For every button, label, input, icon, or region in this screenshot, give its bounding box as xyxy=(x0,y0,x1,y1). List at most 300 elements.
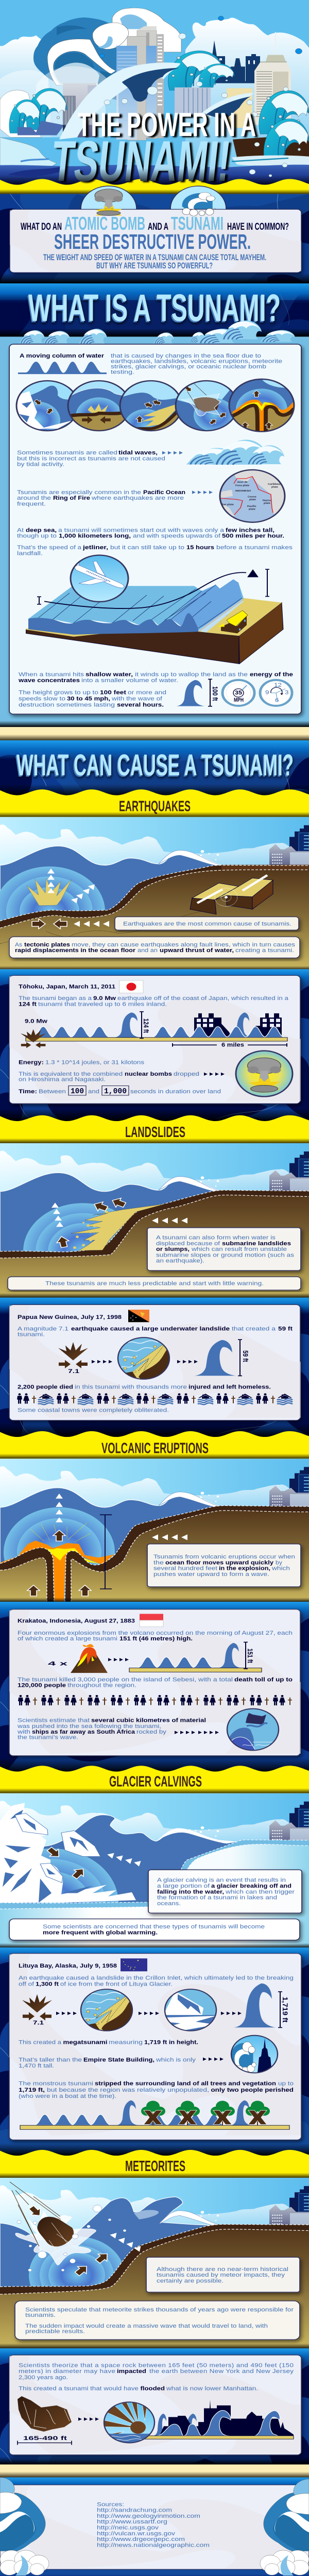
text: height grows: with the wave of xyxy=(111,696,163,702)
ground xyxy=(0,1840,309,1947)
map: ring of fire: Nazca xyxy=(263,499,271,502)
seabed xyxy=(0,2224,309,2348)
circle: landslide xyxy=(81,1989,132,2031)
triangles up xyxy=(47,869,55,893)
icon: atomic bomb circle xyxy=(81,186,136,231)
flood text: This created a tsunami that would have xyxy=(19,2385,139,2392)
icon: 1,719 ft wave xyxy=(234,1984,276,2027)
body text: An earthquake caused a landslide in the Crillon Inlet, which ultimately led to the breaking xyxy=(19,1975,294,1981)
height marker large xyxy=(265,569,269,597)
source list: http://sandrachung.com xyxy=(97,2507,172,2513)
intro question: ATOMIC BOMB xyxy=(64,213,145,234)
triangles left xyxy=(152,1534,187,1540)
shockwave rings xyxy=(0,867,105,956)
text: tidal waves: by tidal activity. xyxy=(17,461,64,467)
circle: earthquake cause xyxy=(67,380,125,432)
callout: volcanic tsunamis: Tsunamis from volcanic eruptions occur when xyxy=(153,1553,295,1560)
text: height grows: or more and xyxy=(128,689,166,696)
decorative wave row xyxy=(19,320,295,344)
sea xyxy=(0,1815,236,1906)
text: shallow water: wave concentrates xyxy=(18,677,80,684)
megatsunami text: measuring xyxy=(109,2039,143,2045)
death toll text: 120,000 people xyxy=(18,1682,66,1688)
text: speed: and with speeds upwards of xyxy=(133,533,221,539)
circle: glacier cause xyxy=(15,380,73,432)
text: definition: strikes, glacier calvings, or oceanic nuclear bomb xyxy=(111,363,266,370)
source list: Sources: xyxy=(97,2501,124,2507)
text: speed: 500 miles per hour. xyxy=(222,533,284,539)
ice chunk middle xyxy=(61,1831,100,1856)
pale building xyxy=(175,88,252,128)
text: definition: that is caused by changes in the sea floor due to xyxy=(111,352,261,359)
flag: Indonesia xyxy=(140,1614,163,1627)
ice chunk upper xyxy=(15,1813,48,1835)
map: ring of fire: plate xyxy=(249,498,256,501)
note: Some coastal towns were completely obliterated. xyxy=(18,1407,169,1413)
cream band xyxy=(0,727,309,740)
eruption rays xyxy=(31,1523,90,1542)
starburst xyxy=(27,878,72,906)
icon: bomb base xyxy=(95,209,122,215)
dark bottom edge xyxy=(0,966,309,969)
map: ring of fire: Cocos xyxy=(248,496,256,498)
circle: iceberg xyxy=(165,1989,216,2031)
callout: submarine landslides: A tsunami can also form when water is xyxy=(156,1234,276,1241)
vegetation text: 1,719 ft, xyxy=(19,2087,45,2093)
text: deep sea: few inches tall, xyxy=(226,527,274,533)
brown arrows xyxy=(56,1196,127,1248)
megatsunami text: megatsunami xyxy=(63,2039,107,2045)
sea xyxy=(0,1173,227,1268)
body text: 2,300 years ago. xyxy=(19,2374,68,2381)
panel: Lituya Bay xyxy=(9,1954,301,2140)
megatsunami text: This created a xyxy=(19,2039,61,2045)
callout: volcanic tsunamis: in the explosion, xyxy=(219,1565,270,1571)
text: definition: earthquakes, landslides, volcanic eruptions, meteorite xyxy=(111,358,282,364)
big blue curling wave xyxy=(33,8,181,100)
plate arrows xyxy=(32,919,67,929)
source list: http://news.nationalgeographic.com xyxy=(97,2542,210,2548)
label: 7.1: 7.1 xyxy=(33,2020,44,2026)
body text: The tsunami began as a xyxy=(19,995,92,1002)
fog over skyline xyxy=(36,66,118,125)
intro section background xyxy=(0,194,309,283)
callout: glacier calving: A glacier calving is an event that results in xyxy=(157,1877,286,1883)
circle: landslide cause xyxy=(119,380,179,432)
big wave xyxy=(114,1012,140,1038)
casualty text: in this tsunami with thousands more xyxy=(75,1384,187,1390)
map: ring of fire: Pacific xyxy=(247,505,256,508)
text: ring of fire: where earthquakes are more xyxy=(91,495,184,501)
teal waves right xyxy=(259,91,309,162)
lava orange xyxy=(0,1540,114,1565)
intro question: AND A xyxy=(148,221,168,232)
label: 151 ft: 151 ft xyxy=(246,1649,254,1663)
heading: LANDSLIDES xyxy=(125,1123,185,1140)
circle: empire state building xyxy=(230,2036,278,2073)
map: ring of fire: plate xyxy=(271,486,278,488)
flood text: what is now lower Manhattan. xyxy=(166,2385,258,2392)
panel: intro xyxy=(10,208,301,273)
dashed crust lines xyxy=(0,1505,309,1602)
callout: submarine landslides: submarine landslides xyxy=(222,1240,291,1246)
empire state text: Empire State Building, xyxy=(83,2057,154,2063)
panel: meteor fact xyxy=(9,2355,301,2455)
band: landslides xyxy=(0,1115,309,1143)
text: height grows: speeds slow to xyxy=(19,696,65,702)
callout: tectonic plates: tectonic plates xyxy=(24,941,70,947)
wave faces xyxy=(171,579,242,629)
heading: EARTHQUAKES xyxy=(119,798,191,815)
text: tidal waves: tidal waves, xyxy=(118,449,158,456)
source list: http://www.geologyinmotion.com xyxy=(97,2513,200,2519)
circle: meteor impact xyxy=(104,2402,154,2443)
material text: the tsunami’s wave. xyxy=(18,1734,78,1740)
text: ring of fire: Tsunamis are especially common in the xyxy=(17,489,141,495)
source list: http://www.ussartf.org xyxy=(97,2518,167,2525)
map: ring of fire: plate xyxy=(249,508,255,511)
callout: scientists speculate: predictable results. xyxy=(25,2328,85,2334)
section background: meteor fact xyxy=(0,2348,309,2465)
circle: volcano cause xyxy=(229,379,294,432)
text: ring of fire: Ring of Fire xyxy=(53,495,90,501)
triangles diagonal xyxy=(71,883,97,903)
body text: of ice from the front of Lituya Glacier. xyxy=(60,1981,173,1987)
sea left xyxy=(0,2223,62,2294)
icon: earthquake burst xyxy=(58,1342,88,1368)
heading: Krakatoa, Indonesia, August 27, 1883 xyxy=(18,1618,135,1624)
energy text: Energy: xyxy=(19,1059,44,1065)
callout: submarine landslides: or slumps, xyxy=(156,1246,190,1252)
causes banner xyxy=(0,740,309,795)
material text: with xyxy=(17,1728,30,1735)
arrows xyxy=(92,1360,112,1363)
icon: wave train xyxy=(18,362,107,374)
callout: glacier calving: a large portion of xyxy=(157,1883,210,1889)
diagram: wave approaching land xyxy=(26,555,283,664)
arrows xyxy=(56,2012,77,2015)
section background: Tohoku xyxy=(0,969,309,1121)
text: shallow water: energy of the xyxy=(250,671,293,677)
yellow wave band xyxy=(0,179,309,207)
callout: tectonic plates: move, they can cause earthquakes along fault lines, which in turn causes xyxy=(72,941,295,947)
arrows xyxy=(78,2417,99,2421)
icon: nuclear bomb circle xyxy=(236,1051,293,1096)
scene: glacier xyxy=(0,1793,309,1947)
text: jetliner: jetliner, xyxy=(82,544,108,551)
left foam xyxy=(0,138,57,166)
text: deep sea: deep sea, xyxy=(26,527,57,533)
empire state text: That’s taller than the xyxy=(19,2057,82,2063)
text: shallow water: into a smaller volume of water. xyxy=(81,677,178,684)
sea xyxy=(0,1488,227,1584)
text: moving column: A moving column of water xyxy=(20,352,104,359)
arrows xyxy=(204,1073,225,1076)
body text: that created a xyxy=(232,1326,276,1332)
body text: of which created a large tsunami xyxy=(18,1635,117,1642)
height arrow xyxy=(44,569,259,608)
crust left xyxy=(0,1548,54,1602)
ice chunk lower xyxy=(40,1863,63,1883)
megatsunami text: 1,719 ft in height. xyxy=(144,2039,198,2045)
callout: glacier calving: which can then trigger xyxy=(225,1889,295,1895)
ground bar xyxy=(144,2436,294,2439)
section background: Lituya Bay xyxy=(0,1947,309,2156)
height marker xyxy=(278,1992,282,2027)
band: meteorites: METEORITES xyxy=(125,2157,185,2174)
main title xyxy=(48,106,256,193)
panel: Krakatoa xyxy=(9,1609,301,1756)
text: speed: though up to xyxy=(17,533,57,539)
section background: sources xyxy=(0,2477,309,2576)
material text: Scientists estimate that xyxy=(18,1717,90,1723)
body text: meters) in diameter may have xyxy=(19,2368,115,2374)
icon: earthquake burst xyxy=(21,1029,46,1048)
callout: volcanic tsunamis: pushes water upward to form a wave. xyxy=(153,1571,269,1578)
text: shallow water: shallow water, xyxy=(85,671,133,677)
material text: was pushed into the sea following the tsunami, xyxy=(17,1723,161,1729)
casualty text: 2,200 people died xyxy=(18,1384,73,1390)
map: ring of fire: North xyxy=(268,471,276,474)
arrows xyxy=(203,2058,224,2061)
callout: submarine landslides: submarine slopes or ground motion (such as xyxy=(156,1252,294,1258)
band: meteorites xyxy=(0,2150,309,2178)
heading: Tōhoku, Japan, March 11, 2011 xyxy=(19,984,115,990)
callout: meteor possible: certainly are possible. xyxy=(157,2278,224,2284)
house xyxy=(218,611,248,633)
scene: earthquake xyxy=(0,817,309,970)
wave train xyxy=(32,1027,285,1038)
label: 59 ft: 59 ft xyxy=(242,1350,249,1362)
right tower xyxy=(254,32,291,125)
scene: landslide xyxy=(0,1143,309,1297)
teal wave centre xyxy=(168,51,223,90)
manhattan skyline xyxy=(153,2400,294,2436)
height marker xyxy=(140,1012,144,1038)
source list: http://vulcan.wr.usgs.gov xyxy=(97,2530,176,2537)
vegetation text: (who were in a boat at the time). xyxy=(19,2093,116,2099)
text: height grows: The height grows to up to xyxy=(19,689,98,696)
callout: scientists speculate: tsunamis. xyxy=(25,2312,56,2318)
casualty text: injured and left homeless. xyxy=(188,1384,271,1390)
wave train xyxy=(136,1657,214,1668)
crust xyxy=(0,1190,309,1258)
equivalent text: on Hiroshima and Nagasaki. xyxy=(19,1076,106,1082)
icon: speedometer: MPH xyxy=(234,697,244,703)
text: deep sea: a tsunami will sometimes start out with waves only a xyxy=(58,527,224,533)
circle: ship xyxy=(227,1709,279,1750)
seabed xyxy=(0,865,309,969)
shockwave rings xyxy=(4,1507,115,1597)
callout: glacier calving: a glacier breaking off and xyxy=(211,1883,291,1889)
body text: earthquake caused a large underwater landslide xyxy=(71,1326,230,1332)
arrows xyxy=(192,490,213,494)
map: ring of fire: INDONESIA xyxy=(235,489,251,493)
brown shore xyxy=(233,137,309,157)
material text: rocked by xyxy=(136,1728,167,1735)
bubbles xyxy=(104,33,288,177)
section background: Papua New Guinea xyxy=(0,1297,309,1437)
windows xyxy=(197,1019,280,1027)
second arcing wave xyxy=(199,93,253,118)
arrows xyxy=(177,1360,198,1363)
body text: off of xyxy=(19,1981,35,1987)
material text: ships as far away as South Africa xyxy=(32,1728,135,1735)
callout: tectonic plates: creating a tsunami. xyxy=(235,947,294,954)
band: glacier calvings xyxy=(0,1766,309,1793)
label: meteor size xyxy=(18,2435,72,2445)
callout: global warming xyxy=(9,1919,300,1940)
body text: tsunami. xyxy=(18,1331,45,1337)
text: height grows: 100 feet xyxy=(100,689,126,696)
icon: wave cluster xyxy=(186,440,284,465)
map: ring of fire xyxy=(220,470,285,522)
source list: http://neic.usgs.gov xyxy=(97,2524,159,2531)
intro question: TSUNAMI xyxy=(171,213,224,234)
triangles xyxy=(107,1853,143,1867)
crust xyxy=(0,865,309,928)
dashed lines xyxy=(0,1840,309,1909)
label: 1,719 ft: 1,719 ft xyxy=(281,1997,289,2023)
foam crest xyxy=(157,1828,236,1843)
brown arrows xyxy=(45,1845,88,1880)
blue droplets xyxy=(99,16,302,58)
callout: glacier calving: the formation of a tsunami in lakes and xyxy=(157,1894,277,1901)
circle: landslide xyxy=(118,1337,169,1379)
height marker small xyxy=(37,597,41,604)
crust right xyxy=(65,1505,309,1602)
text: ring of fire: Pacific Ocean xyxy=(143,489,185,495)
label: meteor size: 165-490 ft xyxy=(23,2435,67,2442)
icon: clock: 9 xyxy=(265,689,269,696)
splash xyxy=(15,2211,96,2265)
triangles up xyxy=(56,1494,63,1522)
callout: submarine landslides: which can result from unstable xyxy=(191,1246,287,1252)
callout: meteor possible: Although there are no near-term historical xyxy=(157,2266,288,2273)
map: ring of fire: Juan de xyxy=(237,481,248,484)
callout: meteor possible: tsunamis caused by meteor impacts, they xyxy=(157,2272,285,2278)
callout: meteor possible xyxy=(146,2257,300,2292)
band: earthquakes xyxy=(0,789,309,817)
section background: Krakatoa xyxy=(0,1602,309,1772)
crossed out trees xyxy=(141,2101,270,2125)
callout: submarine landslides: displaced because of xyxy=(156,1240,220,1246)
body text: Four enormous explosions from the volcano occurred on the morning of August 27, each xyxy=(18,1630,293,1636)
callout: tectonic plates: rapid displacements in the ocean floor xyxy=(15,947,135,954)
glacier ice xyxy=(0,1803,136,1903)
time text: seconds in duration over land xyxy=(130,1088,221,1095)
callout: submarine landslides xyxy=(147,1228,301,1270)
band: volcanic eruptions xyxy=(0,1431,309,1459)
wave train xyxy=(33,2114,225,2125)
text: height grows: several hours. xyxy=(117,702,164,708)
time text: Time: xyxy=(19,1088,37,1095)
light blue section background xyxy=(0,336,309,727)
fault block xyxy=(190,875,273,914)
text: definition: testing. xyxy=(111,369,134,375)
map: ring of fire: Fuca plate xyxy=(235,484,249,487)
heading: VOLCANIC ERUPTIONS xyxy=(101,1439,209,1456)
flag: Japan xyxy=(119,980,143,993)
ground bar xyxy=(26,1038,287,1041)
beach edge xyxy=(198,599,244,632)
circle: meteorite cause xyxy=(176,381,237,432)
panel: what is a tsunami xyxy=(9,344,301,714)
triangles left xyxy=(74,921,109,927)
front arcing wave xyxy=(59,62,180,140)
callout: glacier calving xyxy=(148,1870,302,1913)
water ridge lines xyxy=(37,585,242,629)
map: ring of fire: plate xyxy=(264,502,270,505)
bubbles xyxy=(17,2205,126,2272)
decorative wave right xyxy=(260,2479,309,2575)
panel: sources xyxy=(0,2485,309,2569)
panel: Papua New Guinea xyxy=(9,1304,301,1420)
text: ring of fire: around the xyxy=(17,495,51,501)
vegetation text: stripped the surrounding land of all trees and vegetation xyxy=(95,2080,276,2087)
flag: Papua New Guinea xyxy=(128,1310,149,1322)
text: ring of fire: frequent. xyxy=(17,501,46,507)
callout: tectonic plates: As xyxy=(15,941,22,947)
big wave 2 xyxy=(231,1012,251,1038)
heading: Lituya Bay, Alaska, July 9, 1958 xyxy=(19,1962,117,1969)
text: shallow water: When a tsunami hits xyxy=(19,671,84,677)
timer: 100: 100 xyxy=(71,1087,84,1095)
vegetation text: only two people perished xyxy=(211,2087,294,2093)
equivalent text: dropped xyxy=(174,1071,199,1077)
callout: volcanic tsunamis xyxy=(147,1544,301,1587)
vegetation text: but because the region was relatively unpopulated, xyxy=(47,2087,209,2093)
body text: tsunami that traveled up to 6 miles inland. xyxy=(38,1001,167,1007)
block ground xyxy=(26,598,283,664)
body text: the earth between New York and New Jersey xyxy=(149,2368,294,2374)
callout: scientists speculate: The sudden impact would create a massive wave that would travel to land, with xyxy=(25,2323,268,2329)
map: ring of fire: ellan plate xyxy=(220,503,234,506)
body text: 1,300 ft xyxy=(36,1981,59,1987)
time text: Between xyxy=(39,1088,66,1095)
map: ring of fire: Caribbean xyxy=(268,483,282,486)
icon: clock: 3 xyxy=(285,689,289,696)
text: tidal waves: but this is incorrect as tsunamis are not caused xyxy=(17,455,165,462)
text: jetliner: but it can still take up to xyxy=(110,544,184,551)
big wave xyxy=(218,1643,241,1668)
dashed crust lines xyxy=(0,865,309,928)
body text: 151 ft (46 metres) high. xyxy=(119,1635,193,1642)
text: height grows: destruction sometimes lasting xyxy=(19,702,115,708)
body text: 124 ft xyxy=(19,1001,37,1007)
seabed xyxy=(0,1505,309,1602)
triangles xyxy=(110,2233,143,2253)
height marker xyxy=(238,1340,242,1376)
text: shallow water: it winds up to wallop the land as the xyxy=(135,671,248,677)
central skyscraper xyxy=(116,26,164,140)
callout: glacier calving: falling into the water, xyxy=(157,1889,224,1895)
sea xyxy=(0,846,227,942)
teal wave centre right xyxy=(199,64,234,88)
equivalent text: This is equivalent to the combined xyxy=(19,1071,123,1077)
pictogram row xyxy=(17,1393,293,1404)
icon: volcano xyxy=(71,1644,108,1673)
wave front xyxy=(28,613,198,635)
scene: volcano xyxy=(0,1459,309,1602)
callout: volcanic tsunamis: ocean floor moves upward quickly xyxy=(165,1560,273,1566)
heading: GLACIER CALVINGS xyxy=(109,1773,202,1790)
vegetation text: up to xyxy=(278,2080,294,2087)
text: deep sea: At xyxy=(17,527,24,533)
callout: less predictable: These tsunamis are much less predictable and start with little warning. xyxy=(45,1280,264,1286)
icon: 59 ft wave xyxy=(194,1340,236,1376)
source list: http://www.drgeorgepc.com xyxy=(97,2536,185,2543)
